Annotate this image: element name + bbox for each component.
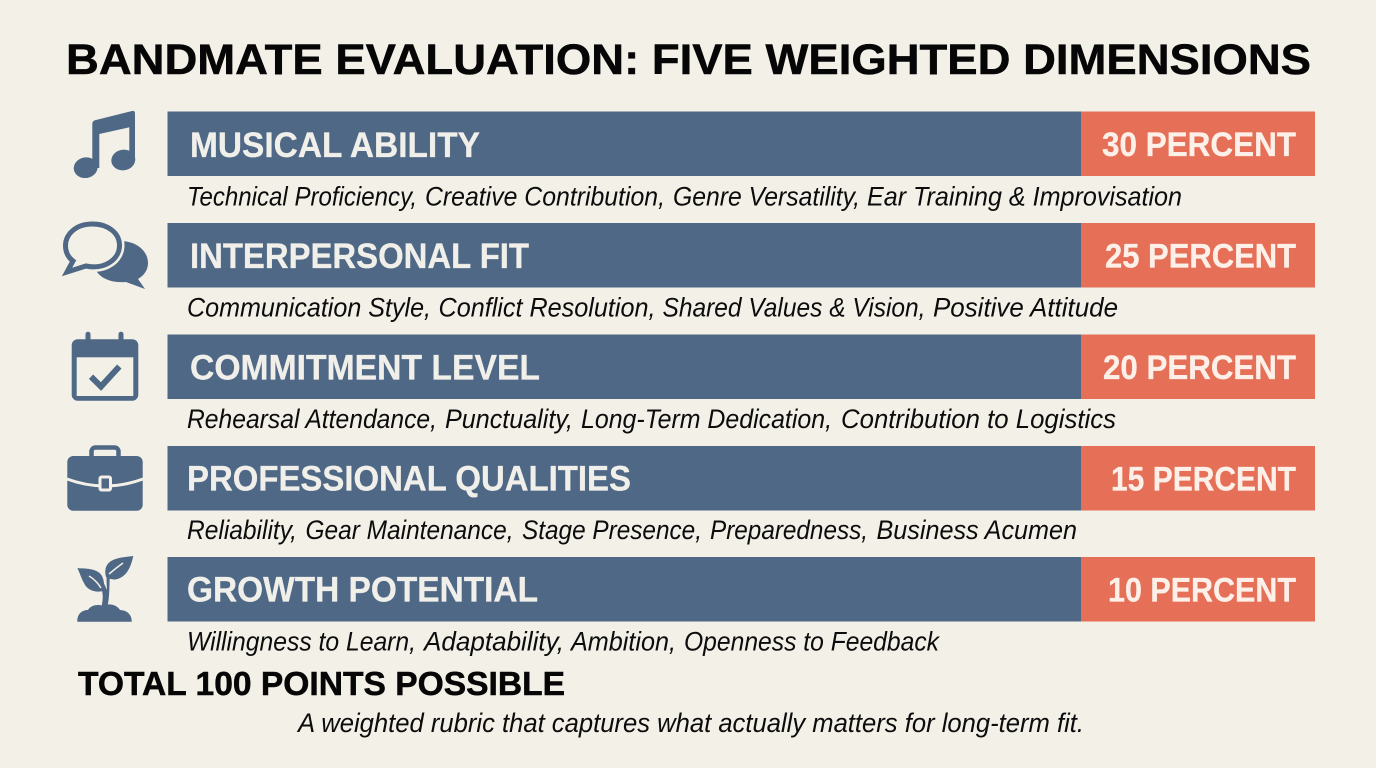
weight: 20 percent: 20 PERCENT (1103, 349, 1296, 387)
criteria: interpersonal fit: Positive Attitude (933, 292, 1118, 322)
criteria: musical ability: Ear Training & Improvisation (867, 182, 1182, 212)
criteria: professional qualities: Reliability, (187, 515, 297, 545)
total points: TOTAL 100 POINTS POSSIBLE (78, 665, 565, 702)
heading: growth potential: GROWTH POTENTIAL (187, 570, 538, 610)
icon: sprout (77, 556, 133, 622)
icon: briefcase (67, 448, 143, 511)
panel: musical ability (72, 111, 1315, 212)
criteria: commitment level: Rehearsal Attendance, (187, 404, 437, 434)
criteria: musical ability (187, 182, 1182, 212)
bar: growth potential (168, 557, 1082, 622)
bar: commitment level (168, 334, 1082, 399)
weight: 30 percent (1081, 112, 1315, 176)
criteria: growth potential: Adaptability, (422, 626, 564, 656)
heading: interpersonal fit: INTERPERSONAL FIT (190, 236, 529, 276)
panel: growth potential (77, 556, 1315, 656)
weight: 15 percent: 15 PERCENT (1111, 460, 1296, 498)
criteria: growth potential: Willingness to Learn, (187, 626, 416, 656)
criteria: professional qualities: Business Acumen (876, 515, 1077, 545)
weight: 30 percent: 30 PERCENT (1102, 126, 1296, 164)
criteria: professional qualities: Preparedness, (710, 515, 868, 545)
criteria: commitment level: Punctuality, (445, 404, 573, 434)
icon: calendar with check (72, 332, 138, 401)
bar: professional qualities (168, 446, 1082, 510)
bar: interpersonal fit (168, 223, 1082, 288)
tagline: A weighted rubric that captures what actually matters for long-term fit. (296, 708, 1084, 738)
criteria: commitment level (187, 404, 1116, 434)
criteria: interpersonal fit: Communication Style, (187, 292, 431, 322)
weight: 20 percent (1081, 334, 1315, 399)
panel: interpersonal fit (66, 223, 1315, 322)
heading: professional qualities: PROFESSIONAL QUALITIES (187, 458, 631, 498)
criteria: interpersonal fit: Shared Values & Vision, (662, 292, 926, 322)
weight: 25 percent (1081, 223, 1315, 288)
heading: commitment level: COMMITMENT LEVEL (190, 348, 540, 388)
criteria: musical ability: Technical Proficiency, (187, 182, 417, 212)
criteria: professional qualities: Gear Maintenance, (306, 515, 514, 545)
panel: professional qualities (67, 446, 1315, 545)
weight: 15 percent (1081, 446, 1315, 510)
weight: 10 percent (1081, 557, 1315, 622)
weight: 25 percent: 25 PERCENT (1105, 238, 1296, 276)
criteria: growth potential: Openness to Feedback (684, 626, 940, 656)
weight: 10 percent: 10 PERCENT (1108, 572, 1296, 610)
criteria: growth potential: Ambition, (569, 626, 676, 656)
criteria: commitment level: Contribution to Logistics (841, 404, 1116, 434)
icon: speech bubbles (66, 224, 148, 289)
panel: commitment level (72, 332, 1315, 434)
criteria: interpersonal fit: Conflict Resolution, (438, 292, 656, 322)
criteria: professional qualities: Stage Presence, (522, 515, 702, 545)
criteria: professional qualities (187, 515, 1077, 545)
criteria: commitment level: Long-Term Dedication, (581, 404, 832, 434)
criteria: interpersonal fit (187, 292, 1118, 322)
icon: music note (72, 111, 137, 180)
criteria: musical ability: Genre Versatility, (673, 182, 860, 212)
criteria: growth potential (187, 626, 940, 656)
title: BANDMATE EVALUATION: FIVE WEIGHTED DIMENSIONS (66, 36, 1311, 84)
criteria: musical ability: Creative Contribution, (425, 182, 665, 212)
heading: musical ability: MUSICAL ABILITY (190, 125, 480, 165)
bar: musical ability (168, 112, 1082, 176)
